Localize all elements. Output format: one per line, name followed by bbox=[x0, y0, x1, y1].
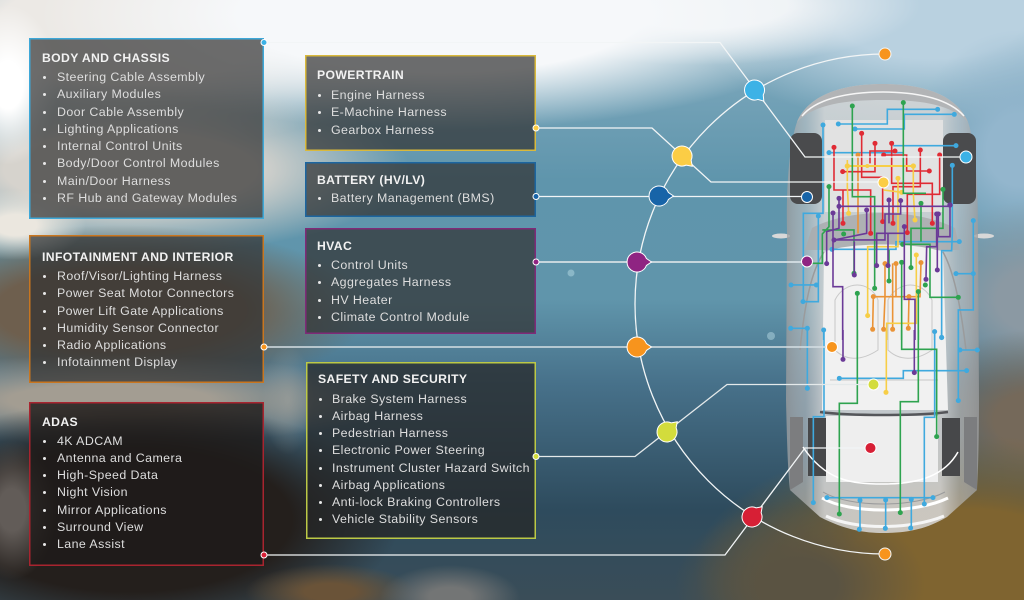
list: body and chassis items bbox=[43, 70, 237, 205]
panel: powertrain bbox=[305, 55, 536, 151]
list: adas items: Lane Assist bbox=[57, 537, 125, 551]
list: adas items: Mirror Applications bbox=[57, 502, 167, 516]
list: adas items: 4K ADCAM bbox=[57, 434, 123, 448]
list: body and chassis items: RF Hub and Gateway Modules bbox=[57, 191, 237, 205]
list: safety items bbox=[319, 392, 530, 526]
list: infotainment items: Infotainment Display bbox=[57, 355, 178, 369]
list: safety items: Pedestrian Harness bbox=[332, 426, 448, 440]
light flares bbox=[568, 270, 775, 340]
list: body and chassis items: Door Cable Assembly bbox=[57, 104, 184, 118]
list: battery items: Battery Management (BMS) bbox=[331, 191, 495, 205]
mirrors bbox=[772, 234, 994, 238]
list: safety items: Airbag Applications bbox=[332, 478, 445, 492]
list: body and chassis items: Internal Control Units bbox=[57, 139, 183, 153]
connector lines bbox=[264, 42, 966, 555]
car body bbox=[772, 84, 994, 533]
list: safety items: Anti-lock Braking Controllers bbox=[332, 495, 500, 509]
list: body and chassis items: Steering Cable Assembly bbox=[57, 70, 205, 84]
yellow wires bbox=[845, 160, 919, 340]
panel: adas bbox=[29, 402, 264, 566]
list: safety items: Brake System Harness bbox=[332, 392, 467, 406]
heading: hvac: HVAC bbox=[317, 239, 352, 253]
panel: infotainment and interior bbox=[29, 235, 264, 383]
list: adas items: High-Speed Data bbox=[57, 468, 158, 482]
panel: safety and security bbox=[306, 362, 536, 539]
list: adas items: Surround View bbox=[57, 520, 144, 534]
rear green wires bbox=[837, 330, 939, 516]
wiring: rear bbox=[805, 330, 980, 532]
list: infotainment items: Power Lift Gate Applications bbox=[57, 304, 224, 318]
panel connector dots bbox=[261, 40, 539, 558]
heading: powertrain: POWERTRAIN bbox=[317, 68, 404, 82]
list: powertrain items: E-Machine Harness bbox=[331, 105, 447, 119]
list: adas items: Night Vision bbox=[57, 485, 128, 499]
seat outlines bbox=[830, 285, 938, 380]
heading: battery: BATTERY (HV/LV) bbox=[317, 173, 425, 187]
list: adas items bbox=[43, 434, 182, 551]
list: safety items: Airbag Harness bbox=[332, 409, 423, 423]
heading: body and chassis: BODY AND CHASSIS bbox=[42, 51, 170, 65]
list: infotainment items: Roof/Visor/Lighting Harness bbox=[57, 269, 222, 283]
heading: safety and security: SAFETY AND SECURITY bbox=[318, 372, 467, 386]
list: safety items: Instrument Cluster Hazard Switch bbox=[332, 460, 530, 474]
rear blue wires bbox=[805, 330, 980, 532]
list: body and chassis items: Lighting Applications bbox=[57, 122, 179, 136]
heading: adas: ADAS bbox=[42, 415, 78, 429]
connector arc bbox=[635, 54, 885, 554]
list: infotainment items: Power Seat Motor Connectors bbox=[57, 286, 234, 300]
list: infotainment items: Radio Applications bbox=[57, 338, 167, 352]
blue wires bbox=[788, 107, 976, 340]
hub: battery bbox=[649, 186, 674, 206]
list: powertrain items: Gearbox Harness bbox=[331, 122, 434, 136]
hub: body and chassis bbox=[740, 76, 771, 108]
hub: infotainment bbox=[627, 337, 652, 357]
hub: adas bbox=[738, 500, 769, 531]
list: body and chassis items: Auxiliary Modules bbox=[57, 87, 161, 101]
list: safety items: Vehicle Stability Sensors bbox=[332, 512, 478, 526]
rear purple wires bbox=[840, 330, 917, 375]
list: infotainment items: Humidity Sensor Connector bbox=[57, 321, 219, 335]
panel: body and chassis bbox=[29, 38, 264, 219]
list: body and chassis items: Main/Door Harness bbox=[57, 174, 171, 188]
list: hvac items: Control Units bbox=[331, 258, 408, 272]
car end dots bbox=[802, 151, 972, 454]
list: adas items: Antenna and Camera bbox=[57, 451, 182, 465]
list: hvac items: Aggregates Harness bbox=[331, 275, 452, 289]
list: powertrain items bbox=[318, 88, 447, 136]
green wires bbox=[802, 100, 961, 340]
hub: hvac bbox=[627, 252, 652, 272]
purple wires bbox=[824, 196, 953, 340]
list: infotainment items bbox=[43, 269, 234, 369]
orange wires bbox=[855, 152, 923, 332]
hub: powertrain bbox=[668, 142, 699, 173]
list: powertrain items: Engine Harness bbox=[331, 88, 425, 102]
list: hvac items: HV Heater bbox=[331, 292, 393, 306]
panel: hvac bbox=[305, 228, 536, 334]
rear yellow wire bbox=[883, 330, 888, 395]
arc end dots bbox=[879, 48, 891, 560]
wiring: front and cabin bbox=[788, 100, 976, 340]
hub: safety bbox=[653, 415, 684, 446]
list: hvac items bbox=[318, 258, 470, 324]
red wires bbox=[831, 131, 942, 236]
list: safety items: Electronic Power Steering bbox=[332, 443, 485, 457]
list: body and chassis items: Body/Door Control Modules bbox=[57, 156, 220, 170]
list: hvac items: Climate Control Module bbox=[331, 310, 470, 324]
heading: infotainment and interior: INFOTAINMENT AND INTERIOR bbox=[42, 250, 234, 264]
panel: battery bbox=[305, 162, 536, 217]
